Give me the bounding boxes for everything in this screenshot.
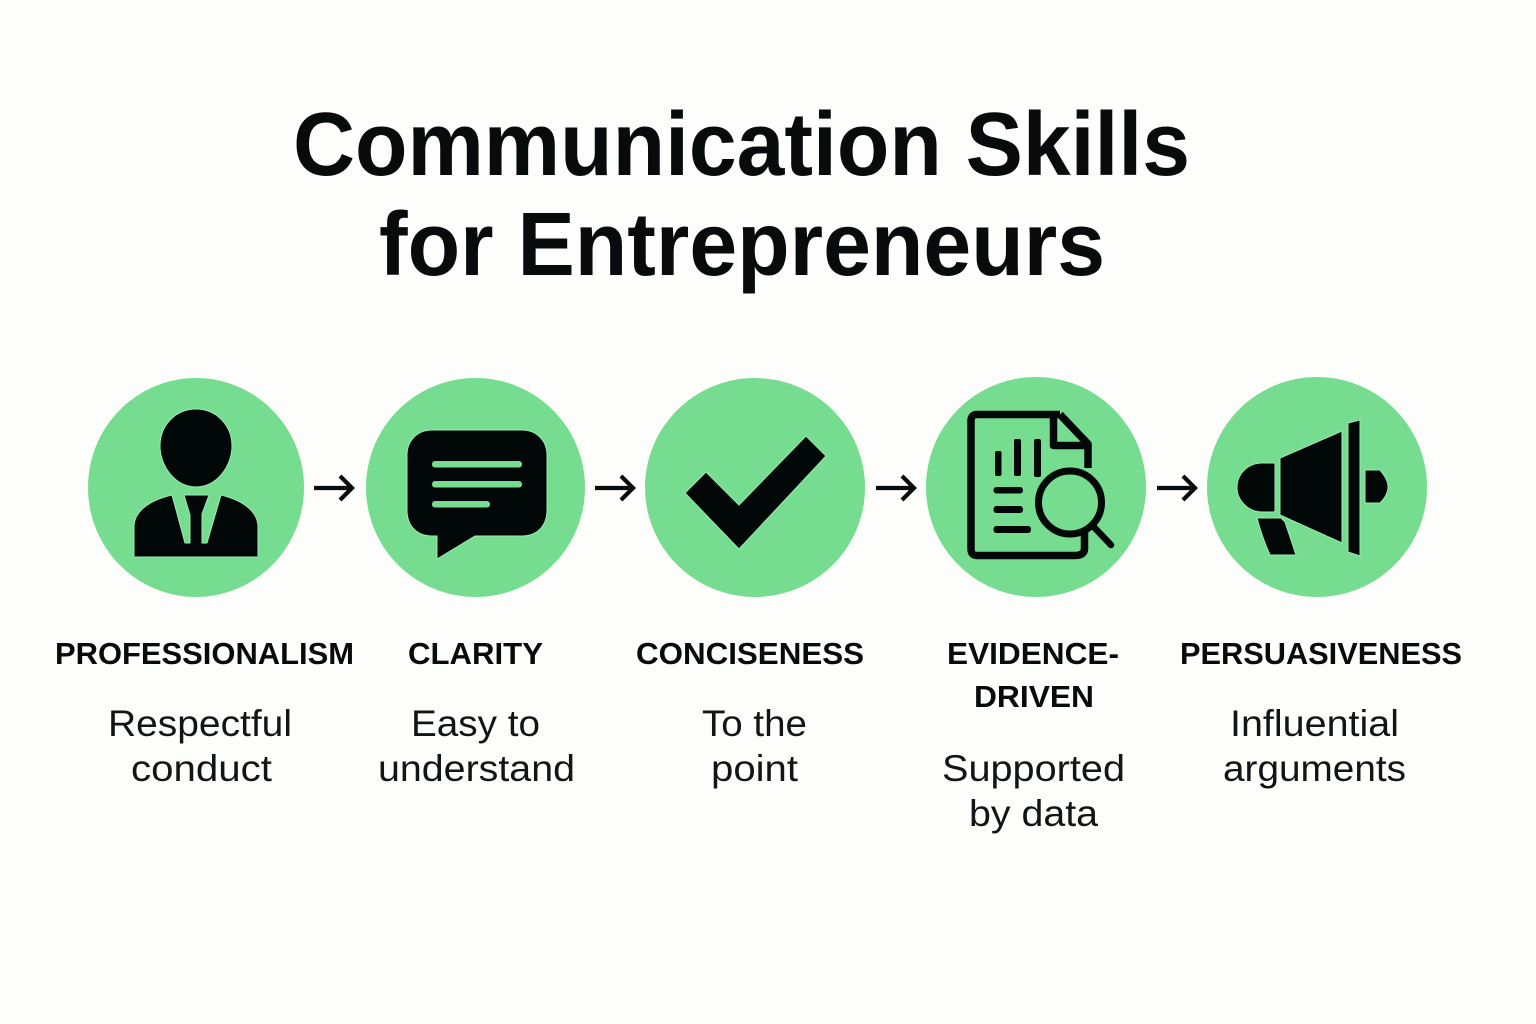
description: Respectful <box>108 703 292 744</box>
description: To the <box>702 703 807 744</box>
heading: PERSUASIVENESS <box>1180 636 1462 671</box>
icon: businessperson <box>88 378 304 597</box>
arrow <box>1157 476 1195 500</box>
heading: CONCISENESS <box>636 636 864 671</box>
heading: DRIVEN <box>974 679 1094 714</box>
description: Easy to <box>411 703 540 744</box>
description: Influential <box>1230 703 1399 744</box>
arrow <box>595 476 633 500</box>
panel: evidence-driven <box>926 377 1146 834</box>
title: Communication Skills <box>293 95 1190 195</box>
icon: megaphone <box>1207 377 1427 597</box>
heading: EVIDENCE- <box>947 636 1119 671</box>
panel: professionalism <box>55 378 354 789</box>
description <box>942 748 1125 834</box>
heading: CLARITY <box>408 636 543 671</box>
arrow <box>314 476 352 500</box>
icon: check mark <box>645 378 865 597</box>
title <box>293 95 1190 295</box>
description <box>108 703 292 789</box>
description: by data <box>969 793 1098 834</box>
panel: persuasiveness <box>1180 377 1462 789</box>
icon: speech bubble <box>366 378 585 597</box>
arrow <box>876 476 914 500</box>
description: point <box>711 748 799 789</box>
description: Supported <box>942 748 1125 789</box>
description: arguments <box>1223 748 1406 789</box>
panel: conciseness <box>636 378 865 789</box>
description <box>378 703 575 789</box>
description <box>702 703 807 789</box>
description: understand <box>378 748 575 789</box>
icon: document with magnifier <box>926 377 1146 597</box>
title: for Entrepreneurs <box>379 195 1105 295</box>
panel: clarity <box>366 378 585 789</box>
heading <box>947 636 1119 714</box>
description <box>1223 703 1406 789</box>
description: conduct <box>131 748 273 789</box>
heading: PROFESSIONALISM <box>55 636 354 671</box>
